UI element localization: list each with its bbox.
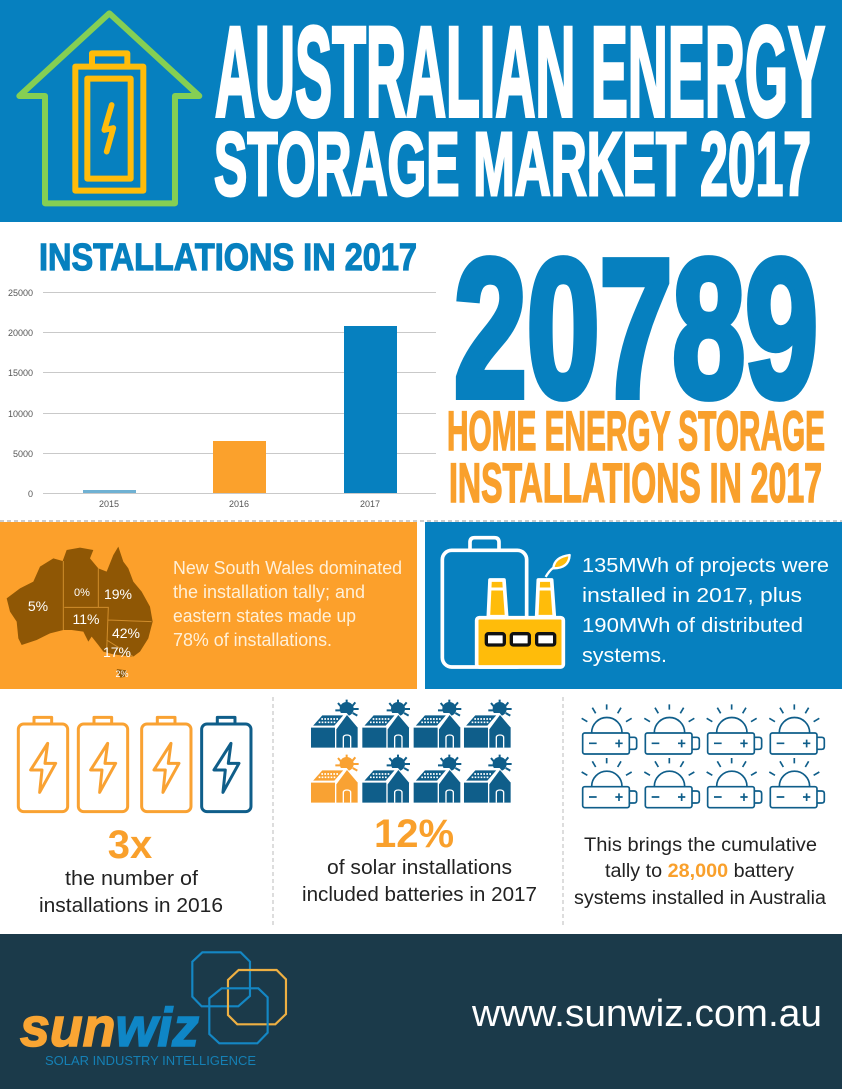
map percentages: 2%: [115, 669, 129, 679]
map of Australia: [7, 547, 153, 678]
panel text: [173, 558, 402, 650]
website url: www.sunwiz.com.au: [471, 993, 822, 1035]
map percentages: 19%: [104, 586, 132, 602]
panel text: systems.: [582, 644, 667, 667]
panel text: the installation tally; and: [173, 582, 365, 602]
logo: sunwiz: [20, 952, 286, 1068]
stat: cumulative tally: [574, 704, 826, 909]
axis labels: 25000: [8, 288, 33, 298]
icon: eight sun batteries: [582, 704, 824, 808]
stat text: [39, 868, 223, 917]
panel text: [582, 554, 829, 667]
map percentages: 11%: [73, 611, 99, 627]
icon: house with battery: [19, 13, 199, 203]
footer band: [0, 934, 842, 1089]
axis labels: 20000: [8, 328, 33, 338]
panel text: installed in 2017, plus: [582, 584, 802, 607]
logo: sunwiz: sunwiz: [20, 996, 199, 1058]
icon: eight solar houses: [310, 700, 512, 803]
icon: four batteries: [18, 717, 251, 812]
chart heading: INSTALLATIONS IN 2017: [39, 237, 417, 279]
stat text: of solar installations: [327, 857, 512, 879]
bar chart: installations in 2017: 2016: [229, 499, 249, 509]
panel: megawatt hours: [425, 522, 842, 689]
stat text: [574, 835, 826, 909]
axis labels: 10000: [8, 409, 33, 419]
axis labels: [8, 288, 33, 499]
panel text: New South Wales dominated: [173, 558, 402, 578]
stat text: systems installed in Australia: [574, 888, 826, 909]
panel text: 78% of installations.: [173, 630, 332, 650]
stat text: the number of: [65, 868, 198, 890]
stat text: tally to 28,000 battery: [605, 861, 795, 882]
map percentages: [28, 586, 140, 679]
stat text: This brings the cumulative: [584, 835, 817, 856]
bar chart: installations in 2017: 2017: [360, 499, 380, 509]
map percentages: 5%: [28, 598, 48, 614]
bar chart: installations in 2017: 2015: [99, 499, 119, 509]
map percentages: 17%: [103, 644, 131, 660]
axis labels: 5000: [13, 449, 33, 459]
panel text: 135MWh of projects were: [582, 554, 829, 577]
stat text: included batteries in 2017: [302, 884, 537, 906]
stat: solar with batteries: [302, 700, 537, 906]
stat value: 3x: [108, 823, 152, 867]
header band: [0, 0, 842, 222]
stat value: 12%: [374, 812, 454, 856]
bars: [83, 326, 397, 493]
panel text: eastern states made up: [173, 606, 356, 626]
icon: battery and factory: [442, 538, 570, 667]
axis labels: 0: [28, 489, 33, 499]
axis labels: 15000: [8, 368, 33, 378]
title: [214, 1, 825, 215]
stat text: [302, 857, 537, 906]
map percentages: 0%: [74, 587, 90, 599]
panel: state map: [0, 522, 417, 689]
stat text: installations in 2016: [39, 895, 223, 917]
map percentages: 42%: [112, 625, 140, 641]
panel text: 190MWh of distributed: [582, 614, 803, 637]
bar chart: installations in 2017: [8, 237, 436, 509]
logo: sunwiz: SOLAR INDUSTRY INTELLIGENCE: [45, 1053, 256, 1068]
stat: 3x installations: [18, 717, 251, 917]
